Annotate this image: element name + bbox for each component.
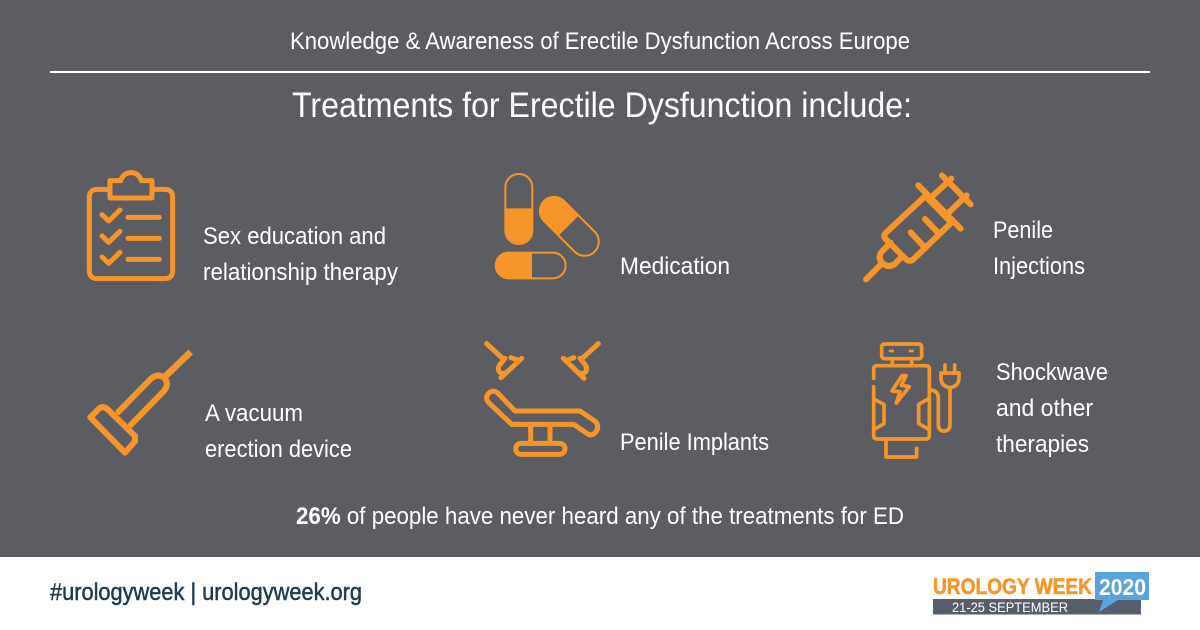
label: sex education: relationship therapy bbox=[203, 259, 398, 286]
title: Treatments for Erectile Dysfunction include: bbox=[292, 86, 912, 125]
label: shockwave: therapies bbox=[996, 431, 1089, 458]
footer band bbox=[0, 557, 1200, 630]
icon: pills bbox=[495, 174, 599, 278]
icon: syringe bbox=[866, 175, 971, 279]
label: vacuum device: A vacuum bbox=[205, 400, 303, 427]
statistic callout: 26% of people have never heard any of the treatments for ED bbox=[296, 503, 904, 530]
icon: shockwave device bbox=[874, 344, 959, 457]
label: penile injections bbox=[993, 217, 1085, 280]
logo: urology week 2020: UROLOGY WEEK bbox=[933, 574, 1092, 599]
label: sex education: Sex education and bbox=[203, 223, 386, 250]
icon: vacuum device bbox=[90, 352, 191, 453]
label: medication: Medication bbox=[620, 253, 730, 280]
label: shockwave: Shockwave bbox=[996, 359, 1108, 386]
label: penile injections: Penile bbox=[993, 217, 1053, 244]
icon: clipboard bbox=[89, 173, 173, 279]
label: vacuum device bbox=[205, 400, 352, 463]
logo: urology week 2020: 2020 bbox=[1099, 574, 1146, 600]
logo: urology week 2020 bbox=[933, 572, 1149, 615]
header text: Knowledge & Awareness of Erectile Dysfunction Across Europe bbox=[290, 28, 910, 55]
label: vacuum device: erection device bbox=[205, 436, 352, 463]
label: penile injections: Injections bbox=[993, 253, 1085, 280]
logo: urology week 2020: 21-25 SEPTEMBER bbox=[952, 600, 1068, 615]
label: penile implants: Penile Implants bbox=[620, 429, 769, 456]
footer hashtag and url: #urologyweek | urologyweek.org bbox=[50, 579, 362, 606]
label: shockwave bbox=[996, 359, 1108, 458]
label: shockwave: and other bbox=[996, 395, 1093, 422]
label: sex education bbox=[203, 223, 398, 286]
icon: surgical chair and lamps bbox=[487, 344, 598, 454]
